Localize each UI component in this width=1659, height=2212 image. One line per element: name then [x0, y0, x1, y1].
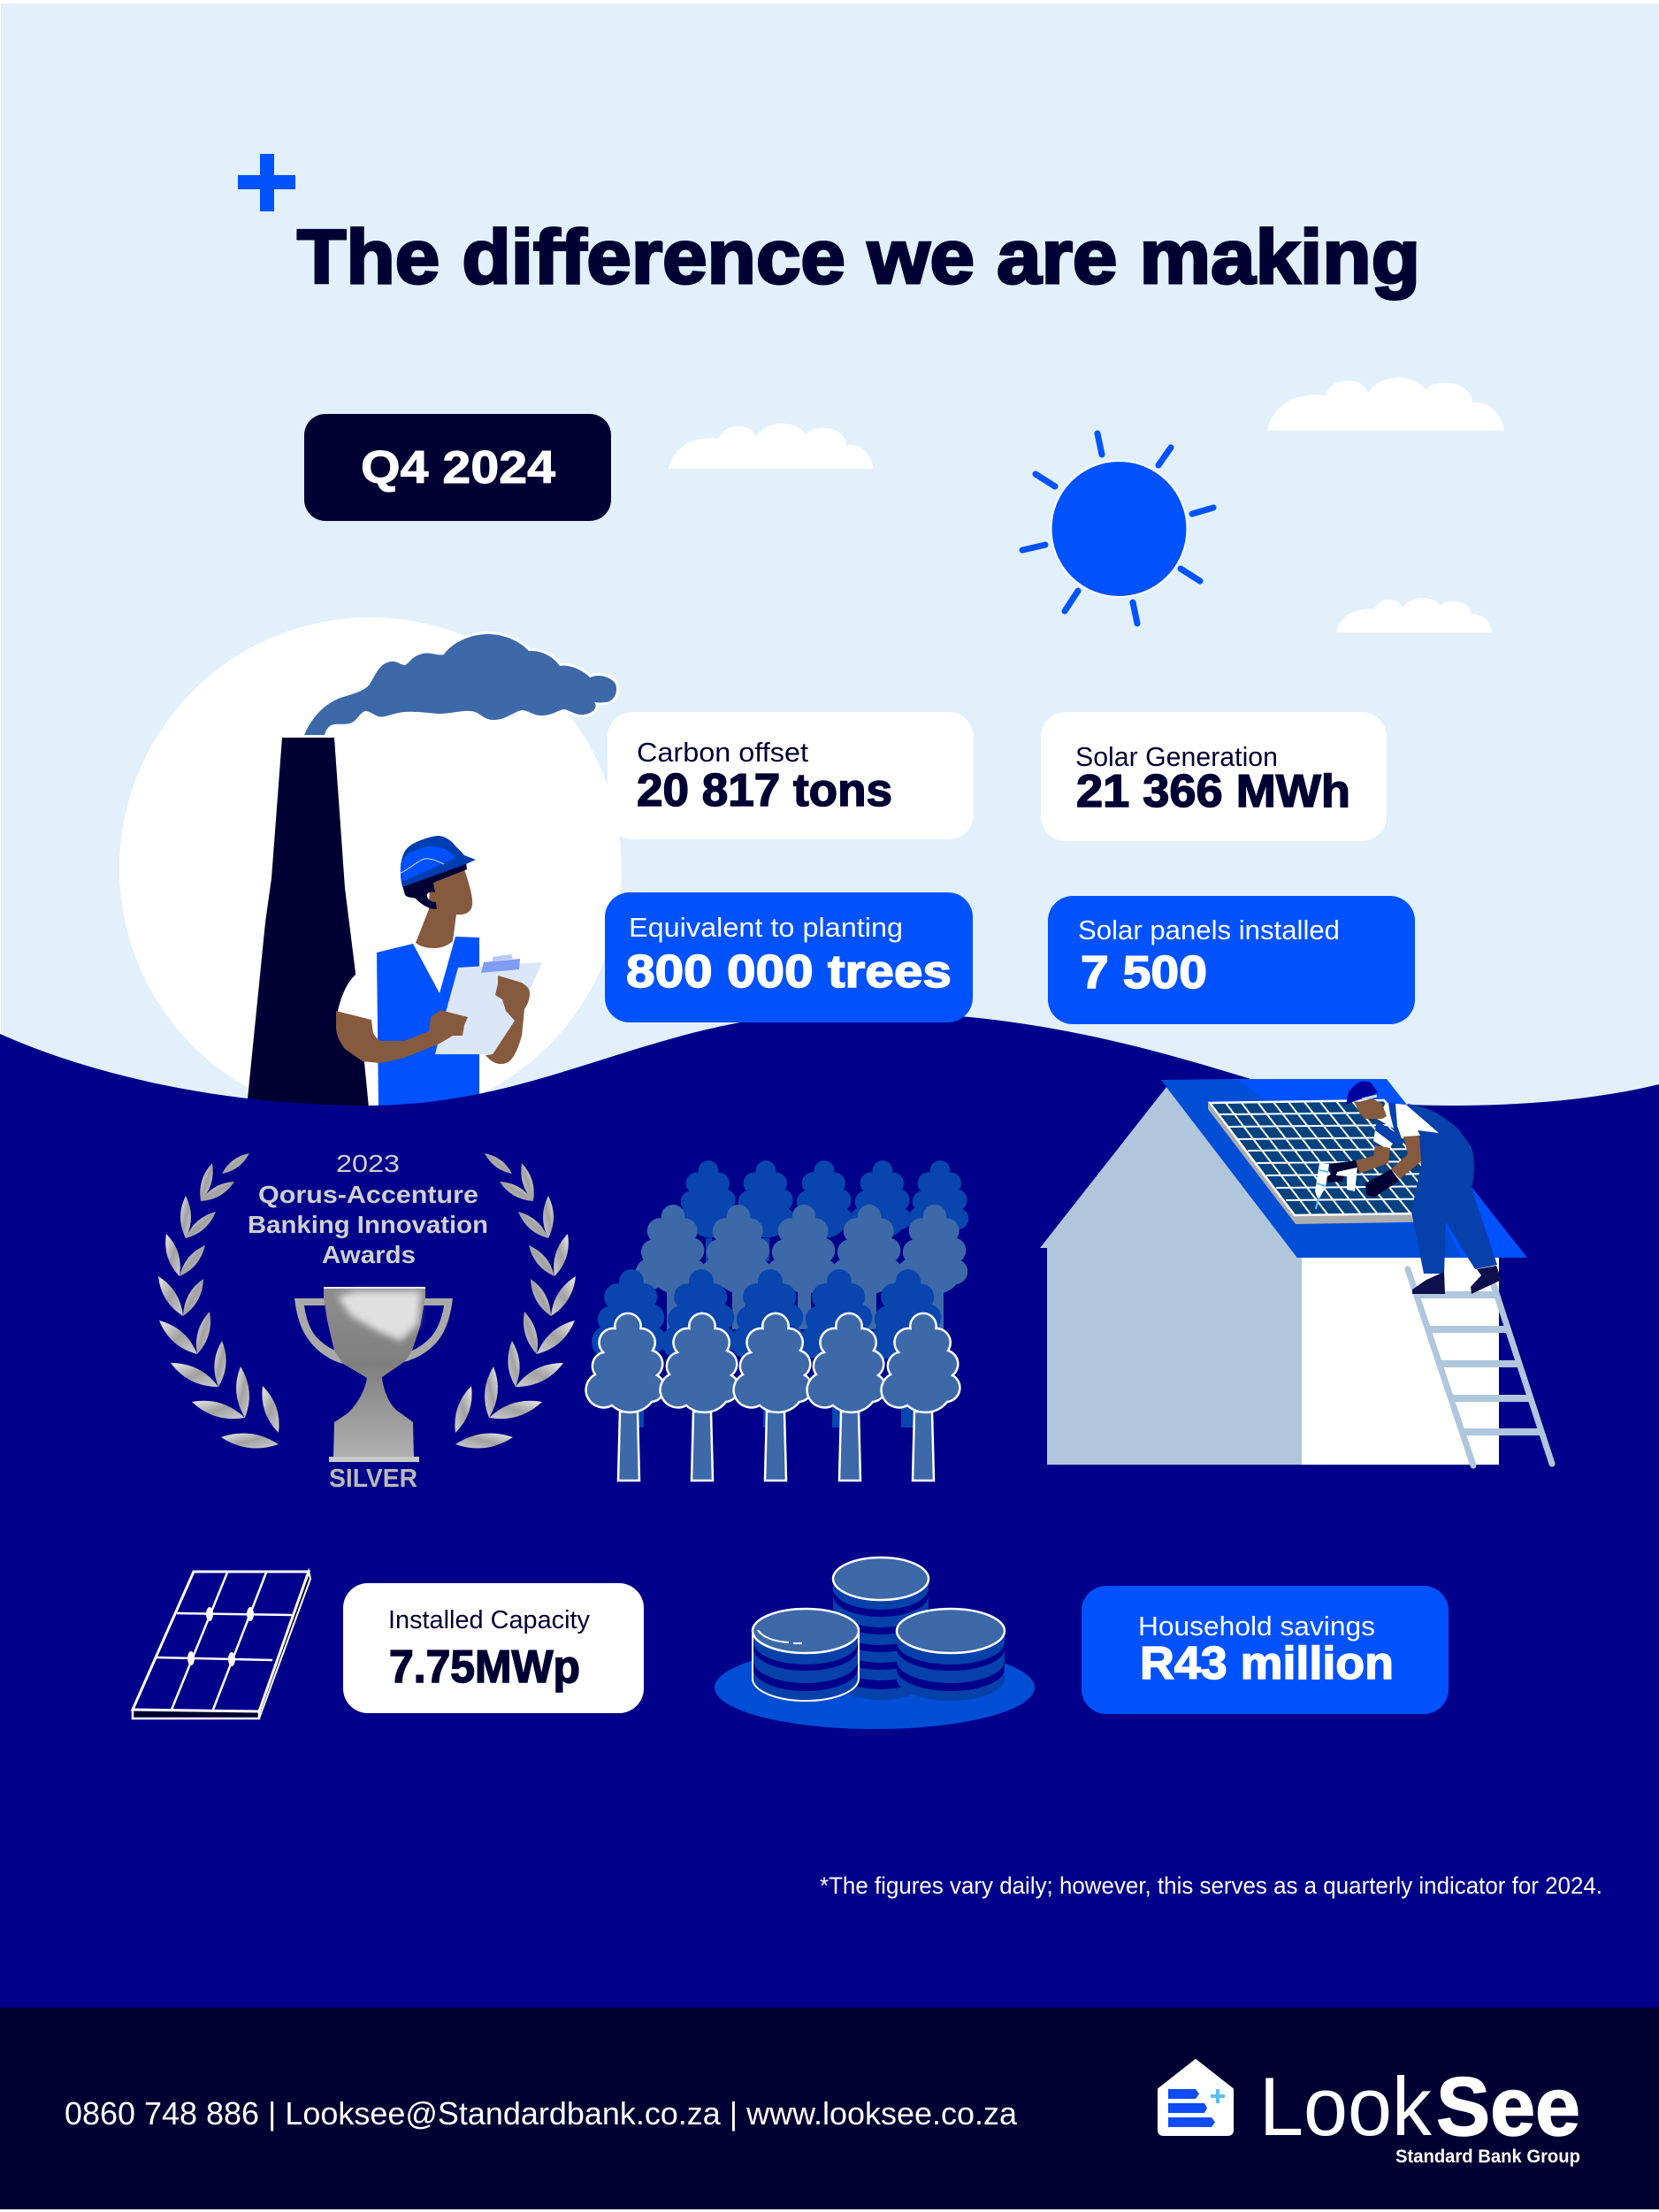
quarter badge: Q4 2024 [361, 442, 555, 494]
card: equivalent trees: 800 000 trees [626, 946, 952, 998]
logo wordmark [1259, 2060, 1580, 2153]
card: solar generation: Solar Generation [1075, 741, 1278, 772]
card: carbon offset: Carbon offset [637, 737, 808, 768]
card: installed capacity: 7.75MWp [389, 1642, 580, 1693]
trophy [294, 1288, 453, 1462]
cloud lower right [1336, 598, 1492, 632]
card: household savings [1082, 1586, 1449, 1714]
coin plate [715, 1646, 1035, 1729]
card: equivalent trees [605, 892, 973, 1022]
contact details: 0860 748 886 | Looksee@Standardbank.co.za | www.looksee.co.za [65, 2095, 1018, 2132]
laurel left [158, 1153, 279, 1449]
footer band [0, 2008, 1659, 2209]
card: carbon offset [608, 712, 974, 839]
card: carbon offset: 20 817 tons [637, 765, 892, 816]
title: The difference we are making [297, 215, 1420, 300]
icon: sun [1022, 433, 1213, 624]
card: solar panels installed: Solar panels installed [1078, 915, 1340, 945]
front row trees [586, 1313, 959, 1481]
cross icon [238, 154, 295, 211]
award: silver trophy and laurels [158, 1150, 576, 1493]
silver label: SILVER [329, 1465, 417, 1493]
card: solar panels installed: 7 500 [1081, 947, 1207, 999]
second row trees [635, 1205, 967, 1329]
icon: solar panel outline [133, 1571, 310, 1718]
factory chimney [247, 738, 369, 1107]
award text: 2023 [336, 1150, 400, 1177]
cloud left [669, 424, 874, 469]
award text: Awards [322, 1241, 416, 1268]
award text: Banking Innovation [248, 1211, 488, 1238]
ladder [1408, 1269, 1552, 1466]
card: solar panels installed [1048, 896, 1415, 1024]
card: equivalent trees: Equivalent to planting [629, 912, 903, 943]
card: installed capacity: Installed Capacity [388, 1606, 590, 1634]
ladder rungs [1417, 1295, 1541, 1432]
award text: Qorus-Accenture [258, 1181, 478, 1208]
card: solar generation: 21 366 MWh [1076, 766, 1350, 817]
logo wordmark: See [1436, 2060, 1580, 2153]
footnote: *The figures vary daily; however, this serves as a quarterly indicator for 2024. [820, 1872, 1602, 1899]
logo wordmark: Look [1259, 2060, 1433, 2153]
icon: coin stacks [715, 1558, 1035, 1729]
card: solar generation [1041, 712, 1387, 841]
coin stack left [753, 1609, 859, 1701]
forest of trees [586, 1160, 968, 1481]
logo house icon [1158, 2060, 1233, 2135]
house shaded wall [1040, 1087, 1302, 1465]
white circle behind factory [119, 617, 622, 1120]
solar panel on roof [1208, 1100, 1478, 1224]
cloud top right [1267, 378, 1504, 431]
award text [248, 1150, 488, 1268]
logo tagline: Standard Bank Group [1395, 2147, 1580, 2167]
quarter badge [304, 414, 611, 521]
sky background [1, 4, 1659, 1153]
third row trees [592, 1269, 943, 1427]
smoke cloud [304, 634, 616, 735]
back row trees [676, 1160, 968, 1261]
coin stack back [833, 1558, 929, 1700]
card: household savings: Household savings [1138, 1611, 1375, 1642]
logo: LookSee [1158, 2060, 1580, 2167]
laurel right [455, 1153, 576, 1449]
roof [1161, 1079, 1527, 1258]
roof worker [1315, 1082, 1502, 1294]
coin stack right [897, 1609, 1005, 1701]
factory worker [336, 836, 542, 1107]
ground wave [0, 1012, 1659, 2009]
card: household savings: R43 million [1140, 1638, 1394, 1689]
card: installed capacity [343, 1583, 644, 1713]
house white wall [1302, 1258, 1499, 1465]
house with solar installation [1040, 1079, 1552, 1466]
